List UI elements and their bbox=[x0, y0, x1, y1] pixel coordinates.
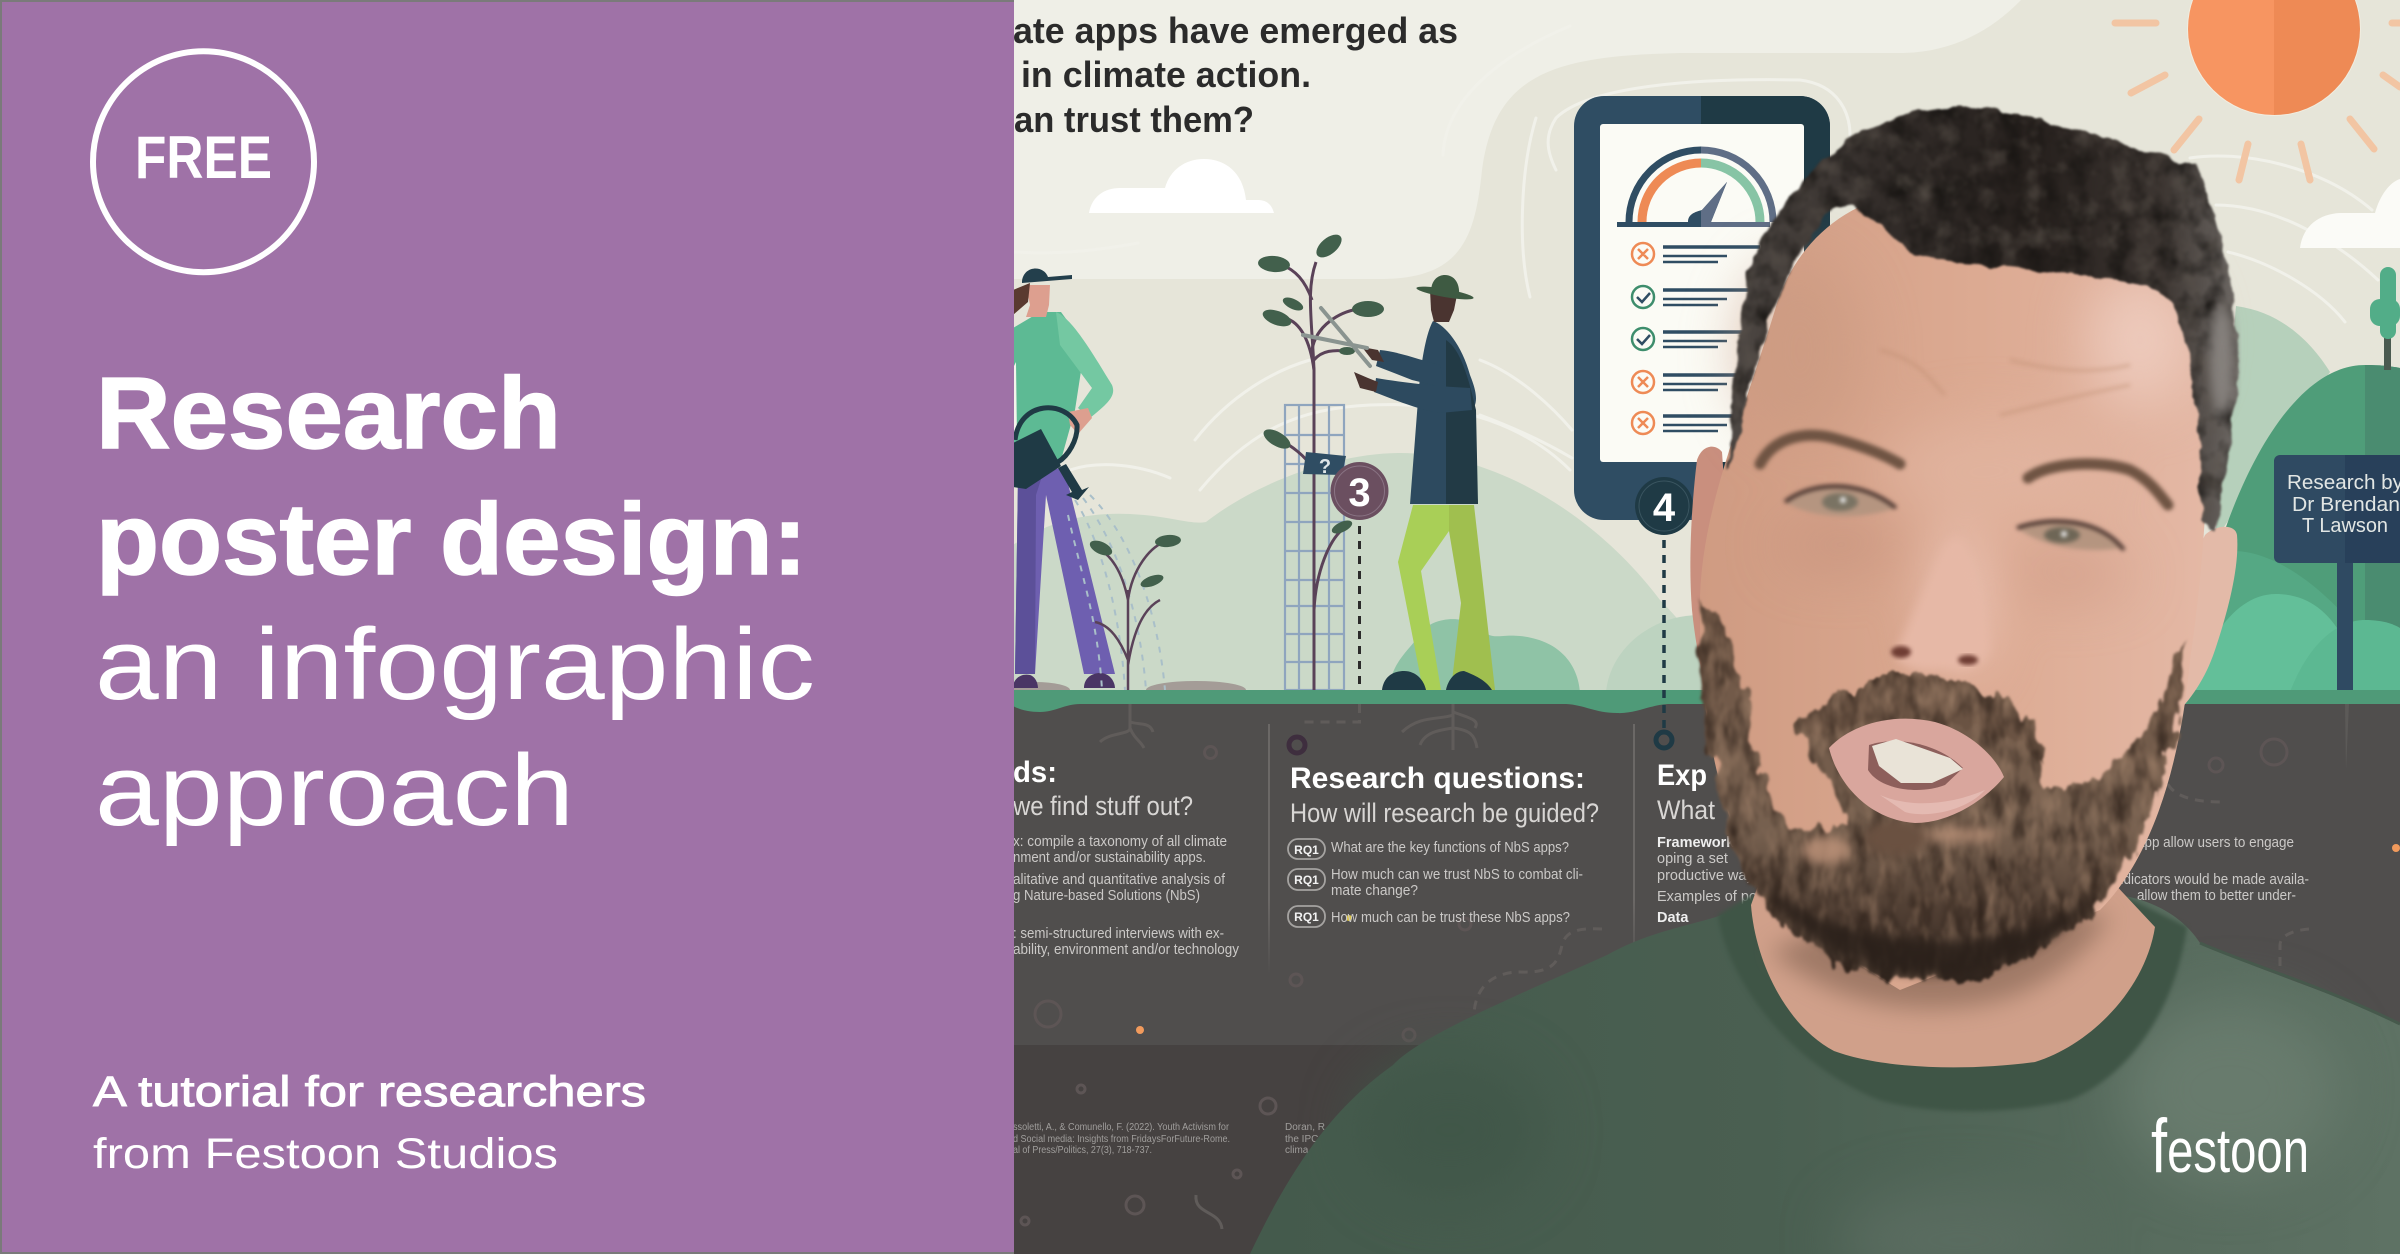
subtitle: A tutorial for researchers bbox=[93, 1068, 646, 1116]
references: ssoletti, A., & Comunello, F. (2022). Youth Activism for bbox=[1013, 1122, 1230, 1133]
water drops bbox=[1068, 495, 1165, 690]
mustache bbox=[1795, 669, 2046, 760]
signpost: Research by bbox=[2287, 472, 2400, 494]
column: expected: app allow users to engage bbox=[2137, 835, 2294, 851]
column: methods: we find stuff out? bbox=[1012, 791, 1193, 821]
sapling with leaves bbox=[1257, 230, 1384, 690]
references: al of Press/Politics, 27(3), 718-737. bbox=[1013, 1145, 1152, 1156]
pruning shears bbox=[1303, 308, 1370, 366]
column: expected: allow them to better under- bbox=[2137, 888, 2296, 904]
pale green hills bbox=[1013, 453, 1725, 692]
grass band bbox=[1013, 690, 2400, 713]
coat bbox=[1410, 321, 1478, 504]
references: clima bbox=[1285, 1145, 1309, 1156]
column: expected bbox=[1657, 759, 2309, 926]
marker 4: 4 bbox=[1653, 486, 1676, 530]
bush bbox=[1388, 619, 1580, 692]
ground layer bbox=[1013, 704, 2400, 1045]
dashed connector 4 bbox=[1662, 540, 1666, 728]
headline: an trust them? bbox=[1014, 99, 1254, 140]
cap bbox=[1022, 268, 1072, 283]
signpost: T Lawson bbox=[2302, 515, 2388, 537]
shoes bbox=[1382, 671, 1492, 690]
shoes bbox=[1013, 673, 1115, 688]
soul patch bbox=[1865, 820, 1925, 856]
shirt bbox=[1014, 312, 1081, 460]
marker 4 bbox=[1635, 477, 1693, 535]
cloud: left bbox=[1089, 159, 1274, 213]
right hills bbox=[2190, 306, 2400, 692]
title: Research bbox=[96, 358, 561, 470]
gauge bbox=[1617, 150, 1773, 224]
column: expected: What bbox=[1657, 795, 1715, 825]
underground decoration bbox=[1021, 704, 2349, 1229]
column: methods: g Nature-based Solutions (NbS) bbox=[1013, 887, 1200, 904]
hair grey side bbox=[2210, 305, 2234, 415]
column dividers bbox=[1268, 724, 1635, 974]
left trouser leg bbox=[1398, 505, 1449, 690]
column: research questions: How much can we trust NbS to combat cli- bbox=[1331, 867, 1583, 883]
title: approach bbox=[95, 735, 574, 847]
marker 3 bbox=[1330, 462, 1388, 520]
title: poster design: bbox=[96, 484, 807, 596]
column: research questions: mate change? bbox=[1331, 883, 1418, 899]
right ear bbox=[2175, 527, 2237, 715]
column: research questions: RQ1 bbox=[1294, 910, 1319, 924]
references: the IPC bbox=[1285, 1134, 1318, 1145]
hat bbox=[1416, 275, 1474, 302]
eyebrows bbox=[1760, 435, 2168, 505]
column: methods: x: compile a taxonomy of all climate bbox=[1013, 833, 1227, 850]
chin shadow bbox=[1760, 880, 2100, 975]
headline: in climate action. bbox=[1021, 54, 1311, 95]
signpost bbox=[2274, 455, 2400, 692]
column: research questions bbox=[1288, 762, 1599, 927]
orange dots bbox=[1136, 844, 2400, 1034]
hair bbox=[1013, 283, 1030, 315]
facial shading bbox=[1740, 260, 2190, 675]
neck bbox=[1751, 880, 2155, 1067]
face bbox=[1700, 190, 2207, 990]
panel: title card bbox=[0, 0, 1014, 1254]
left eye bbox=[1785, 486, 1896, 516]
step rings bbox=[1289, 732, 1672, 753]
shirt highlight bbox=[1360, 1000, 2340, 1254]
question tag: ? bbox=[1319, 456, 1331, 478]
festoon logo: festoon bbox=[2151, 1104, 2309, 1189]
sky: pale upper region bbox=[1013, 0, 2021, 279]
column: research questions: What are the key functions of NbS apps? bbox=[1331, 840, 1569, 856]
column: research questions: How will research be guided? bbox=[1290, 798, 1599, 828]
column: methods: : semi-structured interviews with ex- bbox=[1013, 925, 1224, 942]
nose bbox=[1891, 535, 1990, 671]
references: d Social media: Insights from FridaysForFuture-Rome. bbox=[1013, 1134, 1230, 1145]
forehead wrinkles bbox=[1880, 350, 2130, 415]
column: expected: Exp bbox=[1657, 759, 1707, 792]
tree guard grid bbox=[1285, 405, 1344, 690]
column: methods: ability, environment and/or technology bbox=[1013, 941, 1239, 958]
column: expected: indicators would be made availa- bbox=[2113, 872, 2309, 888]
hair bbox=[1729, 107, 2238, 530]
column: research questions: RQ1 bbox=[1294, 873, 1319, 887]
neck stubble bbox=[1770, 900, 2110, 1008]
title: an infographic bbox=[95, 609, 815, 721]
small pale hill bbox=[1606, 615, 1702, 690]
left gardener watering plant bbox=[1000, 268, 1246, 699]
left ear bbox=[1690, 447, 1735, 680]
trousers bbox=[1015, 467, 1115, 674]
presenter bbox=[1250, 107, 2400, 1254]
rocks bbox=[1014, 681, 1246, 690]
collar bbox=[1718, 896, 2187, 1111]
shoulder seam bbox=[2200, 943, 2400, 1024]
column: expected: Examples of pol bbox=[1657, 889, 1760, 905]
head bbox=[1430, 290, 1458, 322]
illustrated poster background bbox=[1000, 0, 2400, 1254]
column: methods: ds: bbox=[1013, 756, 1057, 789]
decorative air curves bbox=[1069, 78, 2380, 492]
hand bbox=[1068, 408, 1092, 434]
sleeves bbox=[1374, 350, 1472, 413]
headline bbox=[1014, 16, 1456, 132]
tree bbox=[2370, 267, 2400, 370]
shirt bbox=[1250, 896, 2400, 1254]
subtitle: from Festoon Studios bbox=[93, 1130, 558, 1178]
column: methods bbox=[1012, 756, 1239, 958]
right trouser leg bbox=[1449, 505, 1495, 690]
head and neck bbox=[1026, 285, 1050, 317]
column: expected: oping a set bbox=[1657, 851, 1728, 867]
stray yellow dot bbox=[1346, 915, 1352, 921]
badge: free: FREE bbox=[135, 124, 272, 191]
column: research questions: How much can be trust these NbS apps? bbox=[1331, 910, 1570, 926]
column: expected: productive way bbox=[1657, 868, 1754, 884]
references: Doran, R bbox=[1285, 1122, 1325, 1133]
cloud: right bbox=[2300, 179, 2400, 248]
column: research questions: RQ1 bbox=[1294, 843, 1319, 857]
question tag bbox=[1303, 452, 1346, 478]
signpost: Dr Brendan bbox=[2292, 494, 2400, 516]
seedling bbox=[1088, 534, 1181, 690]
right eye bbox=[2017, 521, 2124, 550]
watering can bbox=[1013, 429, 1061, 489]
tablet with credibility gauge bbox=[1574, 96, 1830, 520]
sun bbox=[2115, 0, 2400, 180]
column: methods: nment and/or sustainability apps. bbox=[1013, 849, 1206, 866]
title bbox=[95, 358, 815, 847]
references layer bbox=[1013, 1045, 2400, 1254]
column: expected: Framework bbox=[1657, 835, 1735, 851]
right gardener pruning bbox=[1354, 275, 1495, 690]
marker 3: 3 bbox=[1348, 471, 1371, 515]
column: methods: alitative and quantitative analysis of bbox=[1013, 871, 1226, 888]
badge: free bbox=[93, 51, 314, 272]
references bbox=[1013, 1122, 1325, 1156]
column: research questions: Research questions: bbox=[1290, 762, 1585, 795]
dashed connector 3 bbox=[1358, 526, 1361, 702]
hands bbox=[1354, 347, 1384, 392]
beard bbox=[1700, 600, 2186, 982]
checklist bbox=[1632, 243, 1760, 434]
subtitle bbox=[93, 1068, 646, 1178]
chin skin hints bbox=[1802, 827, 2000, 864]
mouth bbox=[1829, 719, 2004, 823]
column: expected: Data bbox=[1657, 910, 1689, 926]
headline: ate apps have emerged as bbox=[1013, 10, 1458, 51]
